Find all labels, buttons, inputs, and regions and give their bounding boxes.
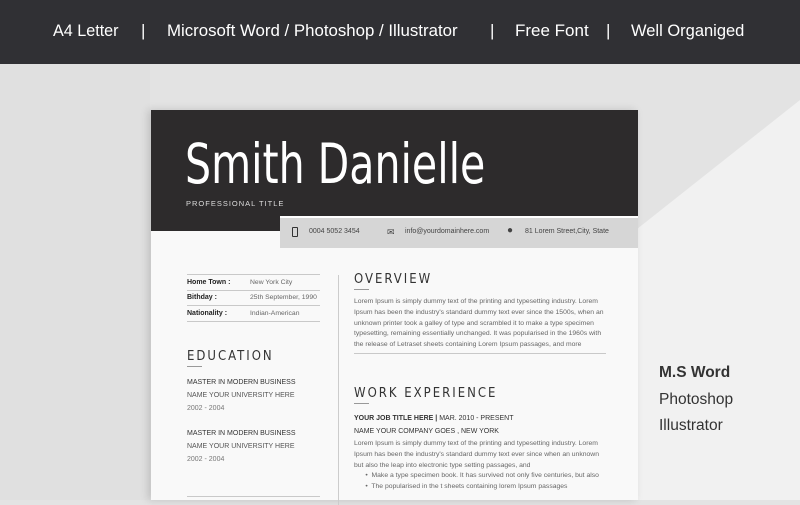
left column: Nationality : bbox=[187, 310, 227, 317]
resume paper bbox=[151, 110, 638, 500]
right column: Lorem Ipsum is simply dummy text of the printing and typesetting industry. Lorem bbox=[354, 298, 598, 305]
left column: NAME YOUR UNIVERSITY HERE bbox=[187, 443, 294, 450]
top bar: Microsoft Word / Photoshop / Illustrator bbox=[167, 21, 458, 40]
top bar: | bbox=[490, 21, 494, 40]
right column: • The popularised in the t sheets containing lorem Ipsum passages bbox=[365, 483, 567, 490]
header: PROFESSIONAL TITLE bbox=[186, 199, 284, 208]
left column: 2002 - 2004 bbox=[187, 405, 224, 412]
left column: NAME YOUR UNIVERSITY HERE bbox=[187, 392, 294, 399]
top bar: Well Organiged bbox=[631, 21, 744, 40]
right column: • Make a type specimen book. It has survived not only five centuries, but also bbox=[365, 472, 599, 479]
right column: Ipsum has been the industry's standard dummy text ever since the 1500s, when an bbox=[354, 309, 604, 316]
right column: WORK EXPERIENCE bbox=[354, 386, 497, 401]
contact bar: ● bbox=[507, 225, 513, 236]
side labels: Photoshop bbox=[659, 390, 733, 408]
contact bar: 0004 5052 3454 bbox=[309, 228, 360, 235]
left column: Home Town : bbox=[187, 279, 230, 286]
left column: Bithday : bbox=[187, 294, 217, 301]
top bar bbox=[0, 0, 800, 64]
contact bar: info@yourdomainhere.com bbox=[405, 228, 489, 235]
right column: the release of Letraset sheets containing Lorem Ipsum passages, and more bbox=[354, 341, 581, 348]
left column: New York City bbox=[250, 279, 292, 286]
right column: typesetting, remaining essentially unchanged. It was popularised in the 1960s with bbox=[354, 330, 601, 337]
top bar: A4 Letter bbox=[53, 21, 119, 40]
top bar: Free Font bbox=[515, 21, 589, 40]
left column: MASTER IN MODERN BUSINESS bbox=[187, 430, 296, 437]
right column: Ipsum has been the industry's standard dummy text ever since when an unknown bbox=[354, 451, 599, 458]
left column: Indian-American bbox=[250, 310, 300, 317]
left column bbox=[187, 274, 320, 497]
right column: YOUR JOB TITLE HERE | MAR. 2010 - PRESENT bbox=[354, 415, 514, 422]
left column: EDUCATION bbox=[187, 349, 274, 364]
side labels: M.S Word bbox=[659, 364, 730, 381]
right column: OVERVIEW bbox=[354, 272, 432, 287]
right column bbox=[354, 272, 606, 490]
top bar: | bbox=[141, 21, 145, 40]
header bbox=[151, 110, 638, 231]
contact bar: ✉ bbox=[387, 227, 395, 237]
left column: 25th September, 1990 bbox=[250, 294, 317, 301]
right column: but also the leap into electronic type setting passages, and bbox=[354, 462, 530, 469]
top bar: | bbox=[606, 21, 610, 40]
header: Smith Danielle bbox=[185, 132, 485, 196]
contact bar bbox=[280, 216, 638, 248]
right column: NAME YOUR COMPANY GOES , NEW YORK bbox=[354, 428, 499, 435]
contact bar: 81 Lorem Street,City, State bbox=[525, 228, 609, 235]
right column: unknown printer took a galley of type and scrambled it to make a type specimen bbox=[354, 320, 594, 327]
right column: Lorem Ipsum is simply dummy text of the printing and typesetting industry. Lorem bbox=[354, 440, 598, 447]
left column: 2002 - 2004 bbox=[187, 456, 224, 463]
side labels bbox=[659, 364, 733, 434]
left column: MASTER IN MODERN BUSINESS bbox=[187, 379, 296, 386]
side labels: Illustrator bbox=[659, 417, 723, 434]
